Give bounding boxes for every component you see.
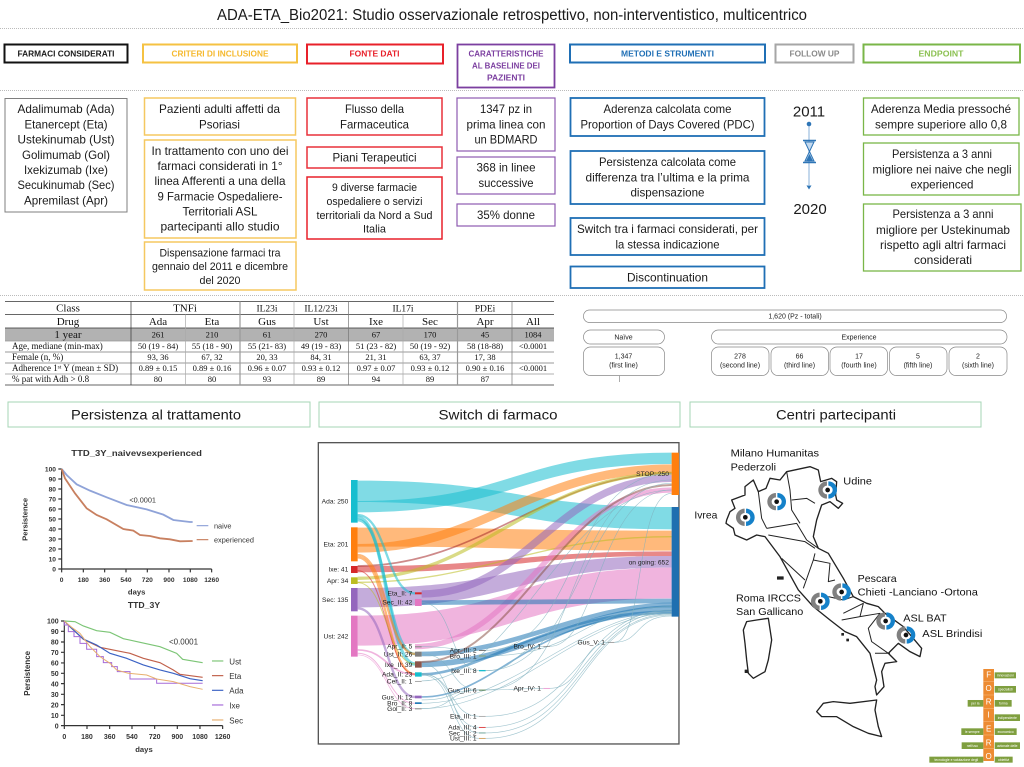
table: baseline and adherence by drug: IL17i xyxy=(392,304,414,314)
text block: persistenza naive: Persistenza a 3 anni xyxy=(892,147,992,161)
text block: drug list: Apremilast (Apr) xyxy=(24,194,108,208)
table: baseline and adherence by drug: 270 xyxy=(315,330,327,340)
text block: flusso xyxy=(307,98,442,135)
text block: switch: Switch tra i farmaci considerati, per xyxy=(577,222,758,236)
text block: dispensazione: Dispensazione farmaci tra xyxy=(160,248,281,260)
chart: kaplan-meier by drug: 1260 xyxy=(215,734,231,741)
sankey labels: Bro_IV: 1 xyxy=(513,644,541,651)
text block: persistenza naive: experienced xyxy=(910,178,974,192)
table: baseline and adherence by drug: Drug xyxy=(57,316,80,328)
text block: persistenza naive: migliore nei naive che negli xyxy=(872,162,1012,176)
logo: FORIERO: nell'uso xyxy=(967,744,978,748)
chart: kaplan-meier naive vs experienced: 540 xyxy=(120,577,132,584)
chart: kaplan-meier by drug: 540 xyxy=(126,734,138,741)
text block: trattamento: Territoriali ASL xyxy=(182,204,258,218)
table: baseline and adherence by drug: 89 xyxy=(426,374,434,384)
panel: metodi e strumenti xyxy=(570,44,765,288)
chart: kaplan-meier naive vs experienced: 900 xyxy=(163,577,175,584)
chart: kaplan-meier naive vs experienced: 720 xyxy=(142,577,153,584)
table: baseline and adherence by drug: <0.0001 xyxy=(519,341,547,351)
chart: kaplan-meier by drug: 0 xyxy=(55,723,59,730)
text block: 1347 pz xyxy=(457,98,555,151)
heading: endpoint xyxy=(864,44,1020,62)
heading: endpoint: ENDPOINT xyxy=(918,48,964,58)
heading: fonte dati: FONTE DATI xyxy=(350,48,400,58)
table: baseline and adherence by drug: 55 (21- 83) xyxy=(248,341,286,351)
heading: farmaci considerati xyxy=(4,44,128,62)
centre labels: Chieti -Lanciano -Ortona xyxy=(858,588,978,599)
sankey labels: STOP: 250 xyxy=(636,471,669,478)
chart: kaplan-meier naive vs experienced: naive xyxy=(214,522,232,531)
chart: kaplan-meier naive vs experienced xyxy=(20,449,254,596)
chart: patient flow diagram: Naïve xyxy=(614,334,633,342)
centre labels: ASL Brindisi xyxy=(922,629,982,640)
heading: persistenza al trattamento: Persistenza al trattamento xyxy=(71,406,241,422)
table: baseline and adherence by drug: 93, 36 xyxy=(147,352,169,362)
sankey labels: Ada_II: 23 xyxy=(382,672,413,679)
chart: kaplan-meier by drug: TTD_3Y xyxy=(128,600,160,610)
table: baseline and adherence by drug: Adherence 1ˢᵗ Y (mean ± SD) xyxy=(12,363,118,373)
chart: patient flow diagram: (fifth line) xyxy=(904,362,932,370)
text block: trattamento: In trattamento con uno dei xyxy=(152,144,288,158)
chart: patient flow diagram: (first line) xyxy=(609,362,638,370)
table: baseline and adherence by drug: 261 xyxy=(152,330,164,340)
text block: switch xyxy=(570,218,764,255)
panel: endpoint xyxy=(864,44,1021,271)
chart: kaplan-meier naive vs experienced: 0 xyxy=(52,566,56,573)
table: baseline and adherence by drug: <0.0001 xyxy=(519,363,547,373)
chart: kaplan-meier naive vs experienced: 360 xyxy=(99,577,111,584)
table: baseline and adherence by drug: 0.96 ± 0.07 xyxy=(248,363,286,373)
text block: farmacie xyxy=(307,177,442,239)
logo: FORIERO: R xyxy=(986,697,992,706)
sankey labels: on going: 652 xyxy=(629,559,669,566)
table: baseline and adherence by drug: 94 xyxy=(372,374,381,384)
chart: kaplan-meier naive vs experienced: experienced xyxy=(214,536,254,545)
text block: 35% donne: 35% donne xyxy=(477,208,535,222)
chart: kaplan-meier naive vs experienced: 90 xyxy=(49,476,56,483)
chart: kaplan-meier naive vs experienced: 1080 xyxy=(183,577,198,584)
chart: kaplan-meier by drug xyxy=(23,600,244,754)
chart: kaplan-meier naive vs experienced: TTD_3Y_naivevsexperienced xyxy=(71,449,202,458)
heading: farmaci considerati: FARMACI CONSIDERATI xyxy=(18,48,114,58)
text block: discontinuation: Discontinuation xyxy=(627,270,708,284)
table: baseline and adherence by drug: 210 xyxy=(206,330,218,340)
text block: 368 in linee: successive xyxy=(478,176,534,190)
sankey labels: Gol_II: 3 xyxy=(387,706,413,713)
heading: caratteristiche: PAZIENTI xyxy=(487,72,525,82)
chart: patient flow diagram: Experience xyxy=(841,334,877,342)
year 2020: 2020 xyxy=(793,201,827,218)
heading: persistenza al trattamento xyxy=(8,402,310,427)
table: baseline and adherence by drug: 170 xyxy=(424,330,436,340)
text block: piani terapeutici: Piani Terapeutici xyxy=(332,150,416,164)
map outline xyxy=(726,467,922,737)
sankey labels: Ust_III: 1 xyxy=(450,736,477,743)
panel: fonte dati xyxy=(307,44,443,239)
table: baseline and adherence by drug: Eta xyxy=(205,316,219,328)
text block: pazienti adulti: Psoriasi xyxy=(199,118,240,132)
chart: kaplan-meier by drug: <0.0001 xyxy=(169,638,199,647)
icon: timeline with hourglass xyxy=(803,122,816,190)
text block: flusso: Flusso della xyxy=(345,102,404,116)
panel: farmaci considerati xyxy=(4,44,128,212)
heading: fonte dati xyxy=(307,44,443,64)
text block: persistenza: Persistenza calcolata come xyxy=(599,155,736,169)
table: baseline and adherence by drug: Sec xyxy=(422,316,438,328)
table: baseline and adherence by drug: 0.89 ± 0.15 xyxy=(139,363,177,373)
chart: kaplan-meier naive vs experienced: 10 xyxy=(49,556,56,563)
table: baseline and adherence by drug: IL12/23i xyxy=(304,304,338,314)
chart: kaplan-meier by drug: Ada xyxy=(229,687,244,696)
logo: FORIERO: specialisti xyxy=(998,688,1013,692)
chart: kaplan-meier naive vs experienced: <0.0001 xyxy=(129,496,156,505)
table: baseline and adherence by drug: 87 xyxy=(481,374,489,384)
text block: persistenza xyxy=(570,151,764,204)
sankey labels: Ixe_III: 8 xyxy=(451,668,477,675)
text block: flusso: Farmaceutica xyxy=(340,118,409,132)
sankey labels: Bro_III: 1 xyxy=(450,653,477,660)
table: baseline and adherence by drug: % pat with Adh > 0.8 xyxy=(12,374,90,384)
chart: kaplan-meier naive vs experienced: 30 xyxy=(49,536,56,543)
chart: kaplan-meier by drug: 0 xyxy=(62,734,66,741)
centre labels: Milano Humanitas xyxy=(731,449,819,460)
chart: patient flow diagram: 278 xyxy=(734,354,746,360)
chart: sankey of drug switches xyxy=(318,443,679,744)
sankey labels: Ada: 250 xyxy=(322,499,349,506)
heading: follow up xyxy=(776,44,854,62)
chart: kaplan-meier by drug: 10 xyxy=(51,713,59,720)
heading: centri partecipanti xyxy=(690,402,981,427)
table: baseline and adherence by drug: Female (n, %) xyxy=(12,352,63,362)
sankey labels: Apr_III: 2 xyxy=(450,648,477,655)
chart: kaplan-meier naive vs experienced: days xyxy=(128,587,145,596)
chart: kaplan-meier by drug: Persistence xyxy=(23,650,32,696)
table: baseline and adherence by drug: 80 xyxy=(154,374,162,384)
chart: kaplan-meier by drug: 90 xyxy=(51,629,59,636)
text block: dispensazione: gennaio del 2011 e dicembre xyxy=(152,261,288,273)
chart: kaplan-meier by drug: Eta xyxy=(229,672,242,681)
text block: 368 in linee: 368 in linee xyxy=(476,160,536,174)
table: baseline and adherence by drug: 58 (18-88) xyxy=(467,341,503,351)
sankey labels: Gus_V: 1 xyxy=(577,640,605,647)
panel: criteri di inclusione xyxy=(143,44,297,290)
text block: persistenza ustekinumab: Persistenza a 3 anni xyxy=(892,207,994,221)
chart: kaplan-meier by drug: Sec xyxy=(229,716,243,725)
sankey labels: Sec_II: 42 xyxy=(382,600,413,607)
table: baseline and adherence by drug: IL23i xyxy=(256,304,278,314)
sankey labels: Sec: 135 xyxy=(322,597,349,604)
text block: 1347 pz: un BDMARD xyxy=(474,132,538,146)
chart: kaplan-meier by drug: days xyxy=(135,745,153,754)
chart: patient flow diagram: (fourth line) xyxy=(841,362,877,370)
heading: criteri di inclusione: CRITERI DI INCLUSIONE xyxy=(172,48,269,58)
chart: patient flow diagram: 5 xyxy=(916,354,920,360)
text block: persistenza naive xyxy=(864,143,1019,195)
sankey labels: Apr_II: 5 xyxy=(387,644,413,651)
sankey labels: Cer_II: 1 xyxy=(387,679,413,686)
table: baseline and adherence by drug: 0.93 ± 0.12 xyxy=(411,363,449,373)
table: baseline and adherence by drug: 80 xyxy=(208,374,216,384)
panel: follow up xyxy=(776,44,854,218)
chart: kaplan-meier naive vs experienced: 100 xyxy=(45,466,56,473)
text block: dispensazione: del 2020 xyxy=(200,275,240,287)
text block: drug list: Adalimumab (Ada) xyxy=(18,102,115,116)
sankey labels: Ada_III: 4 xyxy=(448,725,477,732)
heading: metodi e strumenti xyxy=(570,44,765,62)
table: baseline and adherence by drug: 0.90 ± 0.16 xyxy=(466,363,504,373)
text block: drug list: Ixekizumab (Ixe) xyxy=(24,163,108,177)
chart: kaplan-meier by drug: 720 xyxy=(149,734,161,741)
text block: trattamento: farmaci considerati in 1° xyxy=(158,159,283,173)
table: baseline and adherence by drug: Ada xyxy=(149,316,167,328)
heading: caratteristiche xyxy=(458,44,554,88)
chart: kaplan-meier by drug: 180 xyxy=(81,734,93,741)
chart: patient flow diagram: (sixth line) xyxy=(962,362,994,370)
text block: pazienti adulti xyxy=(144,98,296,135)
logo: FORIERO: O xyxy=(986,752,992,761)
sankey labels: Ust_II: 26 xyxy=(384,651,413,658)
text block: trattamento xyxy=(144,140,296,238)
text block: aderenza media: Aderenza Media pressoché xyxy=(871,102,1011,116)
table: baseline and adherence by drug xyxy=(5,302,554,385)
table: baseline and adherence by drug: All xyxy=(526,316,540,328)
chart: kaplan-meier by drug: Ixe xyxy=(229,701,241,710)
logo: FORIERO: I xyxy=(988,711,990,720)
text block: farmacie: ospedaliere o servizi xyxy=(326,196,422,208)
text block: drug list: Etanercept (Eta) xyxy=(24,118,108,132)
logo: FORIERO: le sempre xyxy=(965,730,980,734)
centre labels: Roma IRCCS xyxy=(736,593,801,604)
chart: patient flow diagram: 17 xyxy=(855,354,863,360)
chart: kaplan-meier by drug: 30 xyxy=(51,692,59,699)
sankey labels: Apr: 34 xyxy=(327,578,349,585)
sankey labels: Sec_III: 2 xyxy=(449,730,477,737)
table: baseline and adherence by drug: 93 xyxy=(263,374,271,384)
text block: discontinuation xyxy=(570,266,764,288)
table: baseline and adherence by drug: 0.89 ± 0.16 xyxy=(193,363,231,373)
text block: farmacie: territoriali da Nord a Sud xyxy=(316,210,432,222)
table: baseline and adherence by drug: 20, 33 xyxy=(256,352,278,362)
text block: persistenza ustekinumab: considerati xyxy=(914,253,972,267)
text block: farmacie: 9 diverse farmacie xyxy=(332,182,417,194)
text block: persistenza: differenza tra l’ultima e la prima xyxy=(586,170,750,184)
text block: switch: la stessa indicazione xyxy=(616,238,720,252)
chart: kaplan-meier by drug: 360 xyxy=(104,734,116,741)
sankey labels: Ixe: 41 xyxy=(328,566,349,573)
table: baseline and adherence by drug: 89 xyxy=(317,374,325,384)
logo: FORIERO: forma xyxy=(999,702,1008,706)
sankey labels: Bro_II: 8 xyxy=(387,700,413,707)
logo: FORIERO: F xyxy=(986,671,991,680)
text block: aderenza media xyxy=(864,98,1019,135)
chart: kaplan-meier naive vs experienced: 0 xyxy=(60,577,64,584)
centre labels xyxy=(694,449,982,640)
sankey labels: Gus_III: 6 xyxy=(448,687,477,694)
table: baseline and adherence by drug: 0.97 ± 0.07 xyxy=(357,363,395,373)
table: baseline and adherence by drug: 67 xyxy=(372,330,380,340)
text block: piani terapeutici xyxy=(307,147,442,168)
table: baseline and adherence by drug: 63, 37 xyxy=(419,352,441,362)
text block: drug list: Secukinumab (Sec) xyxy=(18,178,114,192)
sankey labels: Eta: 201 xyxy=(324,542,349,549)
heading: caratteristiche: CARATTERISTICHE xyxy=(468,48,544,58)
logo: FORIERO: O xyxy=(986,684,992,693)
chart: patient flow diagram: (second line) xyxy=(720,362,760,370)
text block: farmacie: Italia xyxy=(363,224,387,236)
centre labels: Pescara xyxy=(858,574,897,585)
chart: patient flow diagram: 1,347 xyxy=(615,354,632,360)
centre labels: Udine xyxy=(843,477,872,488)
text block: persistenza ustekinumab: migliore per Ustekinumab xyxy=(876,223,1010,237)
table: baseline and adherence by drug: 61 xyxy=(263,330,271,340)
text block: drug list: Golimumab (Gol) xyxy=(22,148,110,162)
logo: FORIERO xyxy=(929,669,1020,763)
sankey labels: Gus_II: 12 xyxy=(382,694,413,701)
heading: switch di farmaco xyxy=(319,402,680,427)
centre labels: ASL BAT xyxy=(903,614,947,625)
centre markers xyxy=(736,481,915,644)
chart: kaplan-meier naive vs experienced: 80 xyxy=(49,486,56,493)
text block: trattamento: 9 Farmacie Ospedaliere- xyxy=(158,190,282,204)
chart: kaplan-meier naive vs experienced: 60 xyxy=(49,506,56,513)
logo: FORIERO: innovazioni xyxy=(997,674,1014,678)
table: baseline and adherence by drug: 1084 xyxy=(524,330,542,340)
chart: kaplan-meier naive vs experienced: 70 xyxy=(49,496,56,503)
chart: patient flow diagram: 66 xyxy=(796,354,803,360)
chart: kaplan-meier naive vs experienced: 180 xyxy=(78,577,89,584)
text block: aderenza xyxy=(570,98,764,136)
heading: criteri di inclusione xyxy=(143,44,297,62)
sankey labels: Eta_II: 7 xyxy=(388,591,413,598)
centre labels: Pederzoli xyxy=(731,462,776,473)
text block: 368 in linee xyxy=(457,157,555,194)
table: baseline and adherence by drug: Apr xyxy=(476,316,494,328)
text block: drug list: Ustekinumab (Ust) xyxy=(18,132,115,146)
logo: FORIERO: indipendente xyxy=(998,716,1017,720)
table: baseline and adherence by drug: PDEi xyxy=(475,304,496,314)
table: baseline and adherence by drug: 49 (19 - 83) xyxy=(301,341,341,351)
text block: 35% donne xyxy=(457,204,555,226)
sankey labels: Ixe_II: 39 xyxy=(385,662,413,669)
panel: caratteristiche al baseline xyxy=(457,44,555,226)
heading: caratteristiche: AL BASELINE DEI xyxy=(472,60,540,70)
table: baseline and adherence by drug: 50 (19 - 92) xyxy=(410,341,450,351)
sankey labels xyxy=(322,471,669,743)
text block: 1347 pz: 1347 pz in xyxy=(480,102,532,116)
heading: follow up: FOLLOW UP xyxy=(790,48,840,58)
chart: kaplan-meier by drug: 60 xyxy=(51,661,59,668)
chart: kaplan-meier naive vs experienced: 1260 xyxy=(204,577,219,584)
sankey labels: Apr_IV: 1 xyxy=(513,686,541,693)
table: baseline and adherence by drug: 50 (19 - 84) xyxy=(138,341,178,351)
table: baseline and adherence by drug: 21, 31 xyxy=(365,352,387,362)
year 2011: 2011 xyxy=(793,104,825,120)
table: baseline and adherence by drug: 84, 31 xyxy=(310,352,332,362)
text block: aderenza: Proportion of Days Covered (PDC) xyxy=(580,118,755,132)
chart: kaplan-meier by drug: 80 xyxy=(51,640,59,647)
chart: kaplan-meier by drug: 900 xyxy=(171,734,183,741)
table: baseline and adherence by drug: TNFi xyxy=(173,302,197,314)
centre labels: San Gallicano xyxy=(736,607,804,618)
chart: kaplan-meier naive vs experienced: Persistence xyxy=(20,498,29,541)
title: ADA-ETA_Bio2021: Studio osservazionale retrospettivo, non-interventistico, multicentrico xyxy=(217,7,807,24)
sankey labels: Eta_III: 1 xyxy=(450,714,477,721)
chart: kaplan-meier by drug: 100 xyxy=(47,619,59,626)
chart: kaplan-meier by drug: 50 xyxy=(51,671,59,678)
chart: patient flow diagram: 1,620 (Pz - totali) xyxy=(768,314,822,320)
text block: dispensazione xyxy=(144,242,296,290)
text block: aderenza media: sempre superiore allo 0,8 xyxy=(875,118,1007,132)
chart: kaplan-meier naive vs experienced: 20 xyxy=(49,546,56,553)
text block: 1347 pz: prima linea con xyxy=(466,118,546,132)
table: baseline and adherence by drug: 0.93 ± 0.12 xyxy=(302,363,340,373)
table: baseline and adherence by drug: Class xyxy=(56,302,80,314)
logo: FORIERO: obiettivi xyxy=(998,758,1010,762)
text block: drug list xyxy=(5,98,127,212)
table: baseline and adherence by drug: 1 year xyxy=(54,329,82,341)
chart: kaplan-meier by drug: 70 xyxy=(51,650,59,657)
text block: trattamento: linea Afferenti a una della xyxy=(154,174,286,188)
sankey nodes xyxy=(351,453,679,739)
chart: kaplan-meier by drug: 40 xyxy=(51,681,59,688)
table: baseline and adherence by drug: Ust xyxy=(313,316,329,328)
logo: FORIERO: E xyxy=(986,725,991,734)
chart: kaplan-meier by drug: 20 xyxy=(51,702,59,709)
logo: FORIERO: azionale delle xyxy=(997,744,1018,748)
heading: centri partecipanti: Centri partecipanti xyxy=(776,406,896,422)
heading: metodi e strumenti: METODI E STRUMENTI xyxy=(621,48,714,58)
text block: trattamento: partecipanti allo studio xyxy=(160,220,280,234)
chart: kaplan-meier naive vs experienced: 40 xyxy=(49,526,56,533)
table: baseline and adherence by drug: 55 (18 - 90) xyxy=(192,341,232,351)
heading: switch di farmaco: Switch di farmaco xyxy=(438,406,558,422)
text block: persistenza ustekinumab: rispetto agli altri farmaci xyxy=(880,238,1006,252)
logo: FORIERO: economico xyxy=(998,730,1014,734)
table: baseline and adherence by drug: Ixe xyxy=(369,316,383,328)
chart: kaplan-meier by drug: 1080 xyxy=(192,734,208,741)
table: baseline and adherence by drug: 17, 38 xyxy=(474,352,496,362)
logo: FORIERO: per la xyxy=(971,702,980,706)
chart: kaplan-meier naive vs experienced: 50 xyxy=(49,516,56,523)
table: baseline and adherence by drug: Age, mediane (min-max) xyxy=(12,341,103,351)
text block: persistenza ustekinumab xyxy=(864,204,1021,271)
chart: patient flow diagram: 2 xyxy=(976,354,980,360)
logo: FORIERO: tecnologie e valutazione degli xyxy=(934,758,978,762)
chart: kaplan-meier by drug: Ust xyxy=(229,657,242,666)
table: baseline and adherence by drug: 45 xyxy=(481,330,489,340)
table: baseline and adherence by drug: Gus xyxy=(258,316,276,328)
text block: aderenza: Aderenza calcolata come xyxy=(604,102,732,116)
centre labels: Ivrea xyxy=(694,511,718,522)
map: participating centres in Italy xyxy=(694,449,982,737)
table: baseline and adherence by drug: 67, 32 xyxy=(201,352,223,362)
chart: patient flow diagram xyxy=(584,310,1007,382)
table: baseline and adherence by drug: 51 (23 - 82) xyxy=(356,341,396,351)
text block: pazienti adulti: Pazienti adulti affetti da xyxy=(159,102,280,116)
logo: FORIERO: R xyxy=(986,739,992,748)
chart: patient flow diagram: (third line) xyxy=(784,362,815,370)
text block: persistenza: dispensazione xyxy=(630,186,705,200)
sankey labels: Ust: 242 xyxy=(324,633,349,640)
